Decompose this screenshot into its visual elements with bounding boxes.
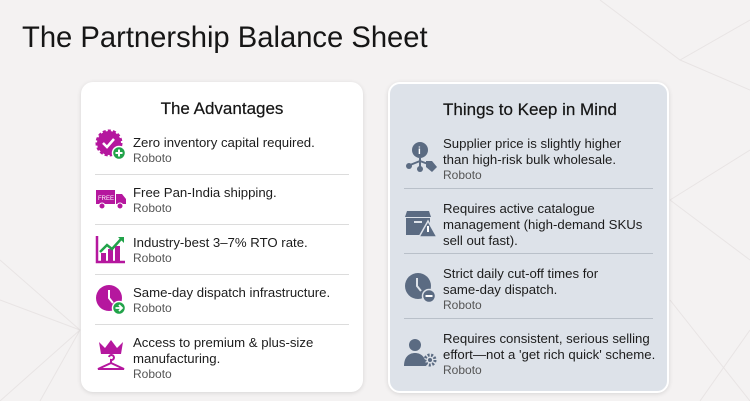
text: selling effort bbox=[443, 331, 655, 377]
text: zero inventory: Roboto bbox=[133, 151, 172, 165]
panel: advantages bbox=[81, 82, 363, 392]
icon: crown hanger bbox=[98, 340, 124, 370]
panel: keep in mind bbox=[388, 82, 669, 393]
text: catalogue: Requires active catalogue bbox=[443, 201, 595, 216]
icon: free truck: FREE bbox=[98, 196, 114, 202]
icon: person gear bbox=[404, 339, 436, 366]
text: cut-off times: Strict daily cut-off times for bbox=[443, 266, 598, 281]
text: supplier price: Supplier price is slightly higher bbox=[443, 136, 621, 151]
icon: box warning bbox=[405, 211, 436, 236]
text: cut-off times: same-day dispatch. bbox=[443, 282, 557, 297]
text: RTO rate: Industry-best 3–7% RTO rate. bbox=[133, 235, 308, 250]
text: zero inventory bbox=[133, 135, 315, 165]
text: premium manufacturing: Roboto bbox=[133, 367, 172, 381]
text: catalogue bbox=[443, 201, 642, 248]
heading: advantages: The Advantages bbox=[161, 99, 283, 118]
text: premium manufacturing: manufacturing. bbox=[133, 351, 220, 366]
text: shipping bbox=[133, 185, 277, 215]
text: selling effort: effort—not a 'get rich quick' scheme. bbox=[443, 347, 655, 362]
text: zero inventory: Zero inventory capital required. bbox=[133, 135, 315, 150]
text: cut-off times bbox=[443, 266, 598, 312]
text: cut-off times: Roboto bbox=[443, 298, 482, 312]
icon: badge check bbox=[96, 130, 125, 159]
text: selling effort: Requires consistent, serious selling bbox=[443, 331, 650, 346]
icon: growth chart bbox=[96, 236, 125, 264]
text: selling effort: Roboto bbox=[443, 363, 482, 377]
heading: keep in mind: Things to Keep in Mind bbox=[443, 100, 617, 119]
text: catalogue: management (high-demand SKUs bbox=[443, 217, 642, 232]
icon: clock bbox=[96, 285, 125, 314]
text: supplier price: Roboto bbox=[443, 168, 482, 182]
text: premium manufacturing: Access to premium & plus-size bbox=[133, 335, 313, 350]
text: shipping: Roboto bbox=[133, 201, 172, 215]
text: dispatch bbox=[133, 285, 330, 315]
text: catalogue: sell out fast). bbox=[443, 233, 518, 248]
title: The Partnership Balance Sheet bbox=[22, 22, 428, 54]
icon: info price: i bbox=[418, 146, 421, 157]
icon: info price bbox=[406, 142, 437, 172]
text: RTO rate bbox=[133, 235, 308, 265]
text: premium manufacturing bbox=[133, 335, 313, 381]
icon: free truck bbox=[96, 190, 126, 208]
text: shipping: Free Pan-India shipping. bbox=[133, 185, 277, 200]
icon: clock minus bbox=[405, 273, 435, 302]
text: supplier price: than high-risk bulk wholesale. bbox=[443, 152, 616, 167]
text: dispatch: Same-day dispatch infrastructure. bbox=[133, 285, 330, 300]
text: RTO rate: Roboto bbox=[133, 251, 172, 265]
text: supplier price bbox=[443, 136, 621, 182]
text: dispatch: Roboto bbox=[133, 301, 172, 315]
